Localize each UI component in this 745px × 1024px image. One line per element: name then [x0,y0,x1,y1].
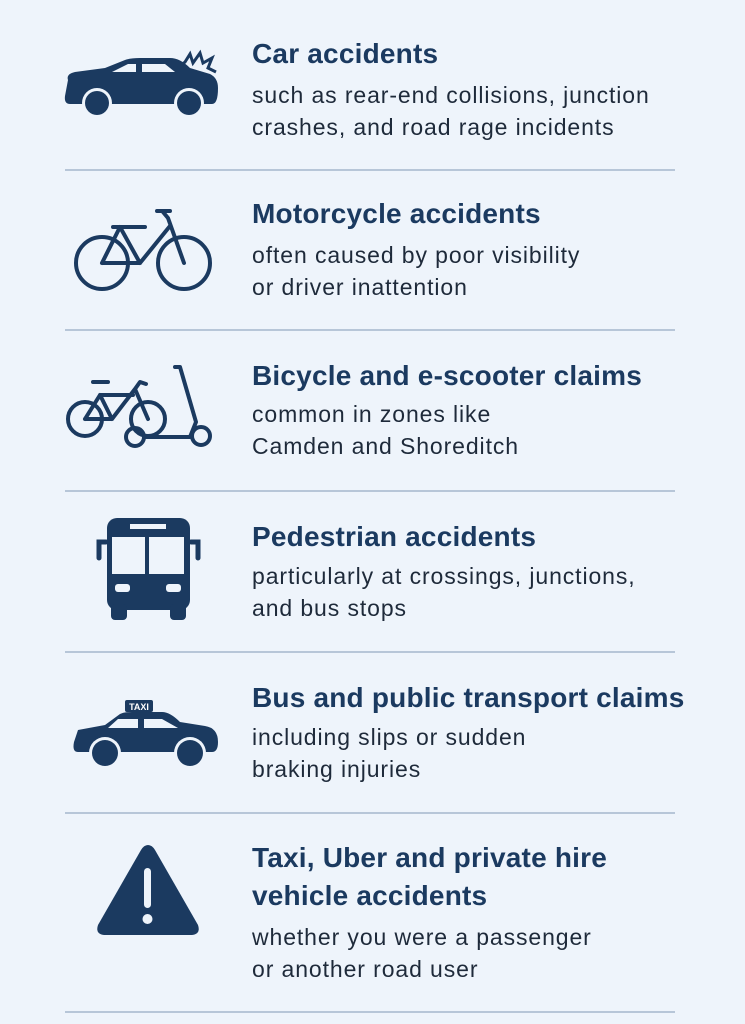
description: such as rear-end collisions, junction [252,82,650,108]
description: particularly at crossings, junctions, [252,563,636,589]
icon: crashed car [64,50,218,115]
title: Bicycle and e-scooter claims [252,360,642,391]
description [252,924,592,982]
title: Pedestrian accidents [252,521,536,552]
icon: warning triangle [97,845,199,935]
title: Motorcycle accidents [252,198,541,229]
title: vehicle accidents [252,880,487,911]
icon: taxi: TAXI [129,702,149,712]
row 2: motorcycle accidents [74,198,580,300]
description: braking injuries [252,756,421,782]
icon: taxi [74,700,218,766]
description: whether you were a passenger [252,924,592,950]
description: crashes, and road rage incidents [252,114,615,140]
description: common in zones like [252,401,491,427]
icon: bicycle and scooter [66,365,212,448]
icon: bus [96,518,200,620]
description: or another road user [252,956,478,982]
description [252,724,526,782]
icon: bicycle [74,209,212,291]
title: Taxi, Uber and private hire [252,842,607,873]
row 3: bicycle and e-scooter [66,360,642,459]
row 1: car accidents [64,38,650,140]
title: Car accidents [252,38,438,69]
description: including slips or sudden [252,724,526,750]
description [252,563,636,621]
description: Camden and Shoreditch [252,433,519,459]
row 6: taxi, uber [97,842,607,982]
title: Bus and public transport claims [252,682,685,713]
description: often caused by poor visibility [252,242,580,268]
row 5: bus and public transport [74,682,685,782]
description: or driver inattention [252,274,468,300]
title [252,842,607,911]
description [252,401,519,459]
description [252,82,650,140]
description [252,242,580,300]
row 4: pedestrian accidents [96,518,636,621]
description: and bus stops [252,595,407,621]
